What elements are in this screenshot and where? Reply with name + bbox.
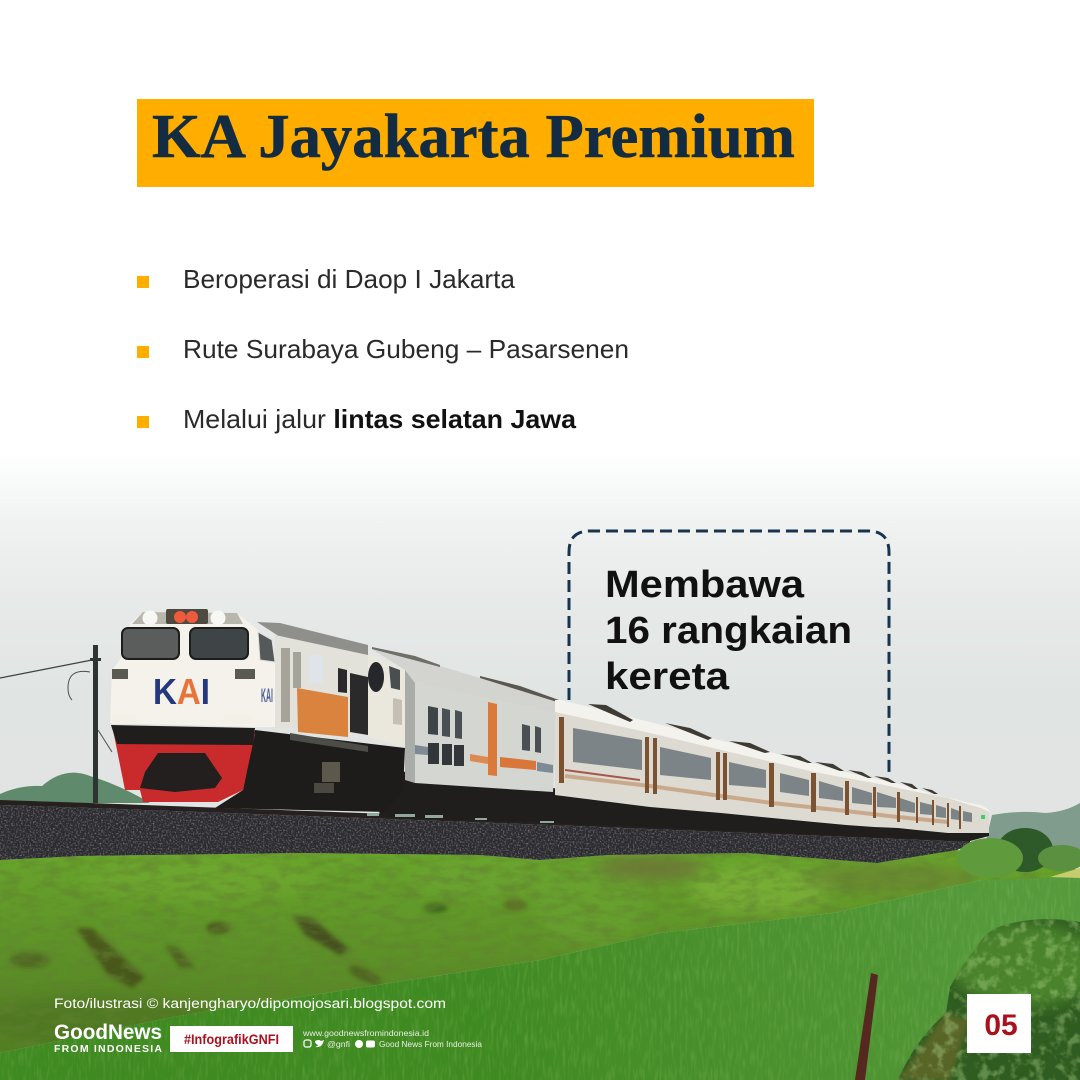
bushes right bbox=[957, 828, 1080, 878]
rear signal light bbox=[981, 815, 985, 819]
distant trees right bbox=[985, 803, 1080, 850]
embankment bbox=[0, 850, 1080, 1060]
social links: www.goodnewsfromindonesia.id bbox=[302, 1029, 429, 1038]
bullet 2: Rute Surabaya Gubeng – Pasarsenen bbox=[183, 334, 629, 364]
callout dashed frame bbox=[569, 531, 889, 776]
cab windows bbox=[122, 628, 179, 659]
icon: instagram bbox=[304, 1040, 311, 1047]
rear coaches body bbox=[555, 712, 989, 833]
icon: youtube bbox=[366, 1040, 375, 1048]
coach windows bbox=[573, 728, 972, 822]
bullet 1: Beroperasi di Daop I Jakarta bbox=[183, 264, 516, 294]
fence post bbox=[855, 973, 878, 1080]
social links bbox=[302, 1029, 483, 1049]
hood KAI mark bbox=[309, 655, 323, 683]
hashtag badge: #InfografikGNFI bbox=[184, 1032, 279, 1047]
train bbox=[110, 609, 989, 841]
red skirt bbox=[113, 730, 255, 802]
distant trees left bbox=[0, 773, 150, 803]
rear coaches roof vents bbox=[588, 704, 938, 794]
callout text: 16 rangkaian bbox=[605, 610, 852, 652]
page number: 05 bbox=[984, 1009, 1018, 1042]
locomotive rear cab bbox=[368, 653, 405, 747]
title banner: KA Jayakarta Premium bbox=[152, 103, 795, 171]
side lamp recesses bbox=[112, 669, 255, 679]
GoodNews logo: GoodNews bbox=[54, 1021, 162, 1044]
GoodNews logo bbox=[54, 1021, 162, 1055]
page number bbox=[967, 994, 1031, 1053]
social links: Good News From Indonesia bbox=[379, 1040, 483, 1049]
hashtag badge bbox=[170, 1026, 293, 1052]
rail gaps bbox=[367, 813, 554, 823]
callout text: Membawa bbox=[605, 564, 805, 606]
front black band bbox=[111, 725, 255, 745]
locomotive undercarriage bbox=[215, 730, 405, 812]
icon: facebook bbox=[355, 1040, 363, 1048]
train: KAI bbox=[261, 686, 273, 707]
KAI logo: KAI bbox=[153, 671, 210, 712]
photo credit: Foto/ilustrasi © kanjengharyo/dipomojosari.blogspot.com bbox=[54, 996, 446, 1011]
headlights bbox=[166, 609, 208, 624]
cow catcher white trim bbox=[112, 714, 252, 724]
bullet 3: Melalui jalur lintas selatan Jawa bbox=[183, 404, 577, 434]
bush bottom right bbox=[890, 915, 1080, 1080]
rear coaches roof bbox=[555, 700, 989, 812]
callout text bbox=[605, 564, 852, 698]
callout text: kereta bbox=[605, 656, 730, 698]
utility pole and wires bbox=[0, 645, 112, 803]
GoodNews logo: FROM INDONESIA bbox=[54, 1043, 162, 1055]
coach doors bbox=[559, 717, 961, 829]
social links: @gnfi bbox=[327, 1040, 350, 1049]
locomotive long hood bbox=[257, 622, 368, 657]
coupler bbox=[140, 753, 222, 792]
coach undercarriage bbox=[370, 745, 989, 841]
first coach bbox=[370, 647, 570, 792]
field bbox=[0, 870, 1080, 1080]
bullet list bbox=[137, 264, 629, 434]
locomotive front body bbox=[110, 612, 275, 727]
ballast bbox=[0, 800, 970, 863]
coach stripe bbox=[565, 776, 948, 822]
icon: twitter bbox=[315, 1040, 324, 1047]
